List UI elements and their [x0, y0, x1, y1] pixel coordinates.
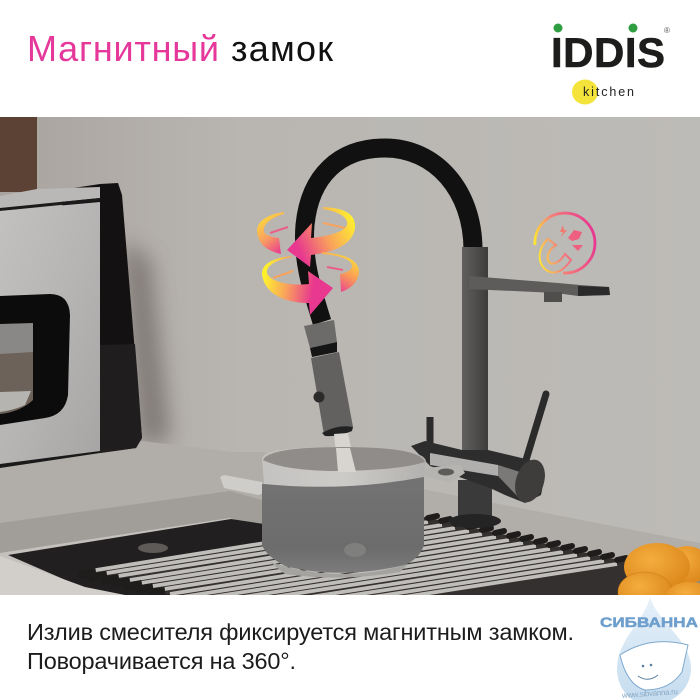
pot base reflection [270, 562, 408, 578]
pot inside [263, 447, 425, 471]
machine shadow [122, 240, 170, 445]
wall [0, 117, 700, 543]
description text: Излив смесителя фиксируется магнитным замком. [27, 619, 574, 645]
sink [8, 519, 290, 595]
right handle [433, 466, 465, 477]
pedestal [458, 480, 492, 518]
faucet [304, 148, 610, 528]
upper left band [257, 212, 284, 254]
title: замок [231, 28, 333, 69]
swivel arm [469, 276, 610, 296]
water stream [334, 433, 351, 447]
spout head [311, 352, 353, 435]
spout collar [304, 320, 337, 348]
bathtub [620, 642, 688, 690]
counter front edge [0, 491, 262, 553]
pour inside pot [336, 448, 356, 472]
photo: kitchen scene [0, 117, 700, 619]
lower right band [322, 252, 359, 292]
lower arrow [262, 256, 333, 315]
right counter lower [626, 576, 700, 584]
logo: iddis kitchen: kitchen [583, 85, 634, 99]
lever [526, 394, 546, 460]
body [411, 441, 545, 503]
rack: roll-up drying mat [91, 513, 628, 595]
pot body [262, 476, 424, 573]
spout button [314, 392, 324, 402]
brand name: СИБВАННА [600, 614, 698, 630]
logo: iddis kitchen: IDDIS [551, 29, 665, 76]
pot [220, 447, 465, 578]
icon: magnet [535, 213, 595, 273]
logo: iddis kitchen: ® [664, 26, 670, 35]
title: Магнитный [27, 28, 219, 69]
oranges [618, 543, 700, 595]
column [462, 247, 488, 452]
pot rim [262, 447, 426, 487]
coffee machine [0, 183, 142, 468]
title [27, 28, 333, 69]
sink highlight [138, 543, 168, 553]
description text: Поворачивается на 360°. [27, 648, 296, 674]
small handle [426, 417, 434, 443]
drop [617, 597, 691, 700]
watermark: sibvanna [600, 597, 698, 700]
logo: iddis kitchen [551, 24, 670, 104]
url: www.sibvanna.ru [621, 687, 678, 700]
wooden panel [0, 117, 37, 192]
countertop [0, 441, 700, 559]
icon: rotation arrows [257, 207, 359, 315]
front counter corner [0, 556, 125, 595]
description text [27, 619, 574, 674]
upper arrow [287, 207, 355, 267]
hose [304, 148, 473, 322]
left handle [220, 475, 263, 495]
front counter [0, 518, 234, 578]
